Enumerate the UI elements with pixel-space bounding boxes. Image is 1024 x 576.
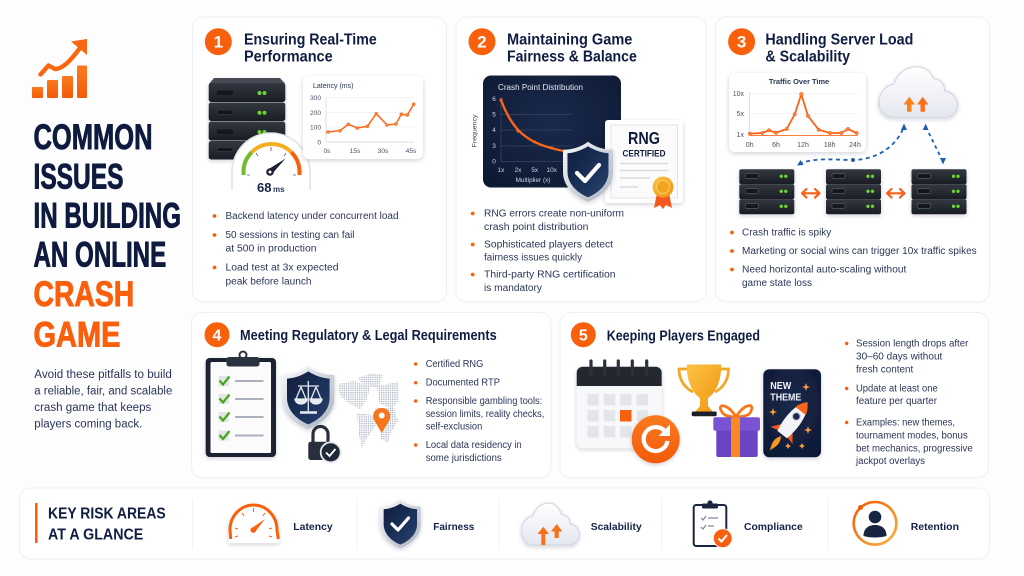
title: common issues in building an online crash game: IN BUILDING: [34, 196, 181, 236]
chart: crash point distribution: 4: [492, 127, 496, 134]
bullets: retention tactics: Examples: new themes,: [856, 418, 955, 429]
bullets: performance issues: 50 sessions in testing can fail: [226, 230, 354, 241]
bullets: regulatory requirements: some jurisdictions: [426, 453, 502, 464]
bullets: regulatory requirements: session limits, reality checks,: [426, 409, 544, 420]
chart: crash point distribution: 1x: [498, 167, 505, 174]
icon: new theme poster with rocket: THEME: [770, 393, 802, 404]
panel 1: ensuring real-time performance: [192, 17, 446, 302]
arrows: dashed links between servers and cloud: [797, 124, 946, 166]
bullets: regulatory requirements: [414, 359, 544, 464]
chart: traffic over time: 12h: [797, 142, 809, 149]
panel 5: keeping players engaged: [560, 312, 988, 478]
badge 5: 5: [579, 328, 588, 344]
panel 3: handling server load and scalability: [716, 17, 990, 302]
panel: key risk areas at a glance: [20, 488, 990, 559]
bullets: fairness issues: Sophisticated players detect: [484, 240, 613, 250]
bullets: retention tactics: fresh content: [856, 365, 914, 376]
icon: gold trophy: [679, 364, 728, 416]
risk item: compliance: Compliance: [744, 521, 803, 533]
title: common issues in building an online crash game: ISSUES: [34, 157, 124, 196]
bullets: retention tactics: Session length drops after: [856, 339, 969, 350]
bullets: regulatory requirements: Local data residency in: [426, 440, 522, 451]
bullets: fairness issues: [471, 208, 624, 294]
icon: latency gauge 68 ms: [232, 133, 310, 195]
heading 3: [765, 32, 913, 66]
chart: crash point distribution: Multiplier (x): [516, 177, 550, 184]
bullets: fairness issues: Third-party RNG certification: [484, 270, 616, 280]
bullets: retention tactics: Update at least one: [856, 384, 938, 394]
chart: latency line chart: 200: [310, 110, 321, 117]
chart: traffic over time: 24h: [849, 142, 861, 149]
icon: new theme poster with rocket: [759, 369, 821, 459]
chart: crash point distribution: 5x: [531, 167, 539, 174]
bullets: performance issues: Backend latency under concurrent load: [226, 211, 398, 222]
bullets: scalability issues: [730, 228, 977, 289]
intro paragraph: a reliable, fair, and scalable: [34, 386, 172, 398]
intro paragraph: [34, 369, 172, 430]
arrows: load balancing between servers: [802, 189, 904, 198]
heading 2: [507, 32, 637, 66]
risk item: retention: [854, 502, 959, 545]
chart: traffic over time: 1x: [737, 132, 744, 139]
badge 2: 2: [477, 33, 487, 52]
bullets: fairness issues: fairness issues quickly: [484, 252, 582, 264]
chart: crash point distribution: 10x: [547, 167, 558, 174]
bullets: scalability issues: game state loss: [742, 278, 812, 289]
title: common issues in building an online crash game: CRASH: [34, 275, 134, 314]
heading 1: Ensuring Real-Time: [244, 32, 377, 48]
axis label: frequency: Frequency: [472, 114, 478, 148]
chart: latency line chart: 300: [310, 95, 321, 102]
chart: latency line chart: 15s: [350, 148, 361, 155]
icon: padlock with check badge: [308, 426, 341, 462]
heading 3: & Scalability: [765, 48, 850, 66]
bullets: fairness issues: is mandatory: [484, 283, 542, 294]
icon: three server stacks: [739, 169, 966, 214]
icon: new theme poster with rocket: NEW: [770, 381, 792, 392]
chart: traffic over time: Traffic Over Time: [769, 77, 829, 86]
chart: crash point distribution: 2x: [515, 167, 522, 174]
icon: cloud with upward arrows: [879, 67, 957, 117]
heading: key risk areas: AT A GLANCE: [48, 526, 143, 543]
heading 2: Fairness & Balance: [507, 48, 637, 66]
intro paragraph: Avoid these pitfalls to build: [34, 369, 172, 381]
icon: server rack: [209, 78, 285, 160]
bullets: regulatory requirements: self-exclusion: [426, 422, 482, 433]
chart: latency line chart: 0: [317, 140, 321, 146]
bullets: fairness issues: crash point distribution: [484, 222, 588, 233]
heading 2: Maintaining Game: [507, 32, 633, 48]
chart: latency line chart: Latency (ms): [313, 83, 353, 90]
badge 4: [204, 322, 230, 347]
risk item: fairness: [380, 500, 474, 548]
risk item: compliance: [694, 500, 803, 548]
bullets: retention tactics: feature per quarter: [856, 396, 938, 407]
heading 1: Performance: [244, 48, 333, 66]
heading 4: Meeting Regulatory & Legal Requirements: [240, 328, 497, 344]
chart: crash point distribution: 0: [492, 158, 496, 166]
bullets: scalability issues: Marketing or social wins can trigger 10x traffic spikes: [742, 246, 977, 257]
intro paragraph: crash game that keeps: [34, 402, 152, 414]
chart: crash point distribution: Crash Point Distribution: [498, 83, 583, 92]
badge 2: [468, 28, 496, 55]
chart: latency line chart: [303, 76, 423, 159]
chart: crash point distribution: 5: [492, 112, 496, 119]
icon: latency gauge 68 ms: ms: [273, 185, 285, 194]
icon: RNG certified certificate: RNG: [628, 128, 660, 148]
bullets: regulatory requirements: Certified RNG: [426, 359, 483, 370]
badge 3: [728, 28, 755, 55]
badge 4: 4: [213, 328, 222, 344]
chart: latency line chart: 30s: [378, 148, 389, 155]
bullets: retention tactics: 30–60 days without: [856, 352, 943, 362]
bullets: fairness issues: RNG errors create non-uniform: [484, 208, 624, 220]
chart: traffic over time: 5x: [737, 111, 744, 118]
bullets: performance issues: at 500 in production: [226, 244, 316, 254]
risk item: latency: Latency: [293, 521, 333, 533]
icon: fairness shield with check: [563, 142, 613, 202]
icon: purple gift box: [713, 406, 760, 457]
title: common issues in building an online crash game: GAME: [34, 316, 120, 354]
chart: crash point distribution: 3: [492, 143, 496, 150]
badge 1: 1: [214, 33, 223, 52]
chart: latency line chart: 100: [310, 124, 321, 132]
bullets: performance issues: Load test at 3x expected: [226, 262, 338, 274]
badge 1: [205, 28, 232, 55]
chart: traffic over time: 18h: [824, 142, 836, 149]
bullets: scalability issues: Crash traffic is spiky: [742, 228, 831, 238]
icon: latency gauge 68 ms: 68: [257, 180, 271, 195]
badge 3: 3: [737, 33, 746, 52]
bullets: performance issues: peak before launch: [226, 276, 312, 288]
icon: calendar with refresh badge: [577, 361, 680, 463]
bullets: retention tactics: bet mechanics, progressive: [856, 444, 973, 454]
chart: traffic over time: 6h: [772, 142, 780, 149]
risk item: latency: [228, 505, 333, 543]
bullets: retention tactics: jackpot overlays: [855, 456, 925, 467]
chart: traffic over time: [729, 73, 866, 152]
bullets: scalability issues: Need horizontal auto-scaling without: [742, 264, 907, 276]
title: common issues in building an online crash game: AN ONLINE: [34, 236, 166, 275]
panel 2: maintaining game fairness and balance: [456, 17, 706, 302]
intro paragraph: players coming back.: [34, 418, 142, 430]
title: common issues in building an online crash game: [34, 118, 181, 354]
icon: dotted world map with location pin: [338, 373, 399, 448]
panel 4: meeting regulatory and legal requirements: [192, 312, 551, 478]
chart: crash point distribution: [483, 76, 621, 188]
heading 1: [244, 32, 377, 66]
bullets: performance issues: [213, 211, 398, 288]
risk item: retention: Retention: [911, 521, 959, 533]
chart: traffic over time: 10x: [733, 91, 744, 98]
risk item: fairness: Fairness: [433, 521, 474, 533]
chart: latency line chart: 45s: [406, 148, 417, 155]
icon: compliance clipboard with checklist: [206, 352, 276, 457]
icon: RNG certified certificate: [605, 120, 683, 209]
heading 5: Keeping Players Engaged: [607, 328, 760, 344]
chart: traffic over time: 0h: [746, 142, 754, 149]
bullets: retention tactics: [845, 339, 973, 467]
icon: rising bar chart with arrow: [32, 39, 87, 98]
risk item: scalability: Scalability: [591, 521, 642, 533]
icon: RNG certified certificate: CERTIFIED: [622, 149, 666, 159]
icon: legal shield with scales: [282, 367, 334, 429]
chart: latency line chart: 0s: [324, 148, 331, 155]
badge 5: [571, 322, 596, 347]
title: common issues in building an online crash game: COMMON: [34, 118, 152, 157]
bullets: regulatory requirements: Documented RTP: [426, 378, 500, 389]
heading: key risk areas: [35, 503, 166, 543]
chart: crash point distribution: 6: [492, 96, 496, 103]
left column: title block: [32, 39, 181, 430]
heading: key risk areas: KEY RISK AREAS: [48, 505, 166, 522]
bullets: regulatory requirements: Responsible gambling tools:: [426, 396, 542, 407]
heading 3: Handling Server Load: [765, 32, 913, 48]
risk item: scalability: [522, 503, 642, 545]
bullets: retention tactics: tournament modes, bonus: [856, 430, 968, 442]
